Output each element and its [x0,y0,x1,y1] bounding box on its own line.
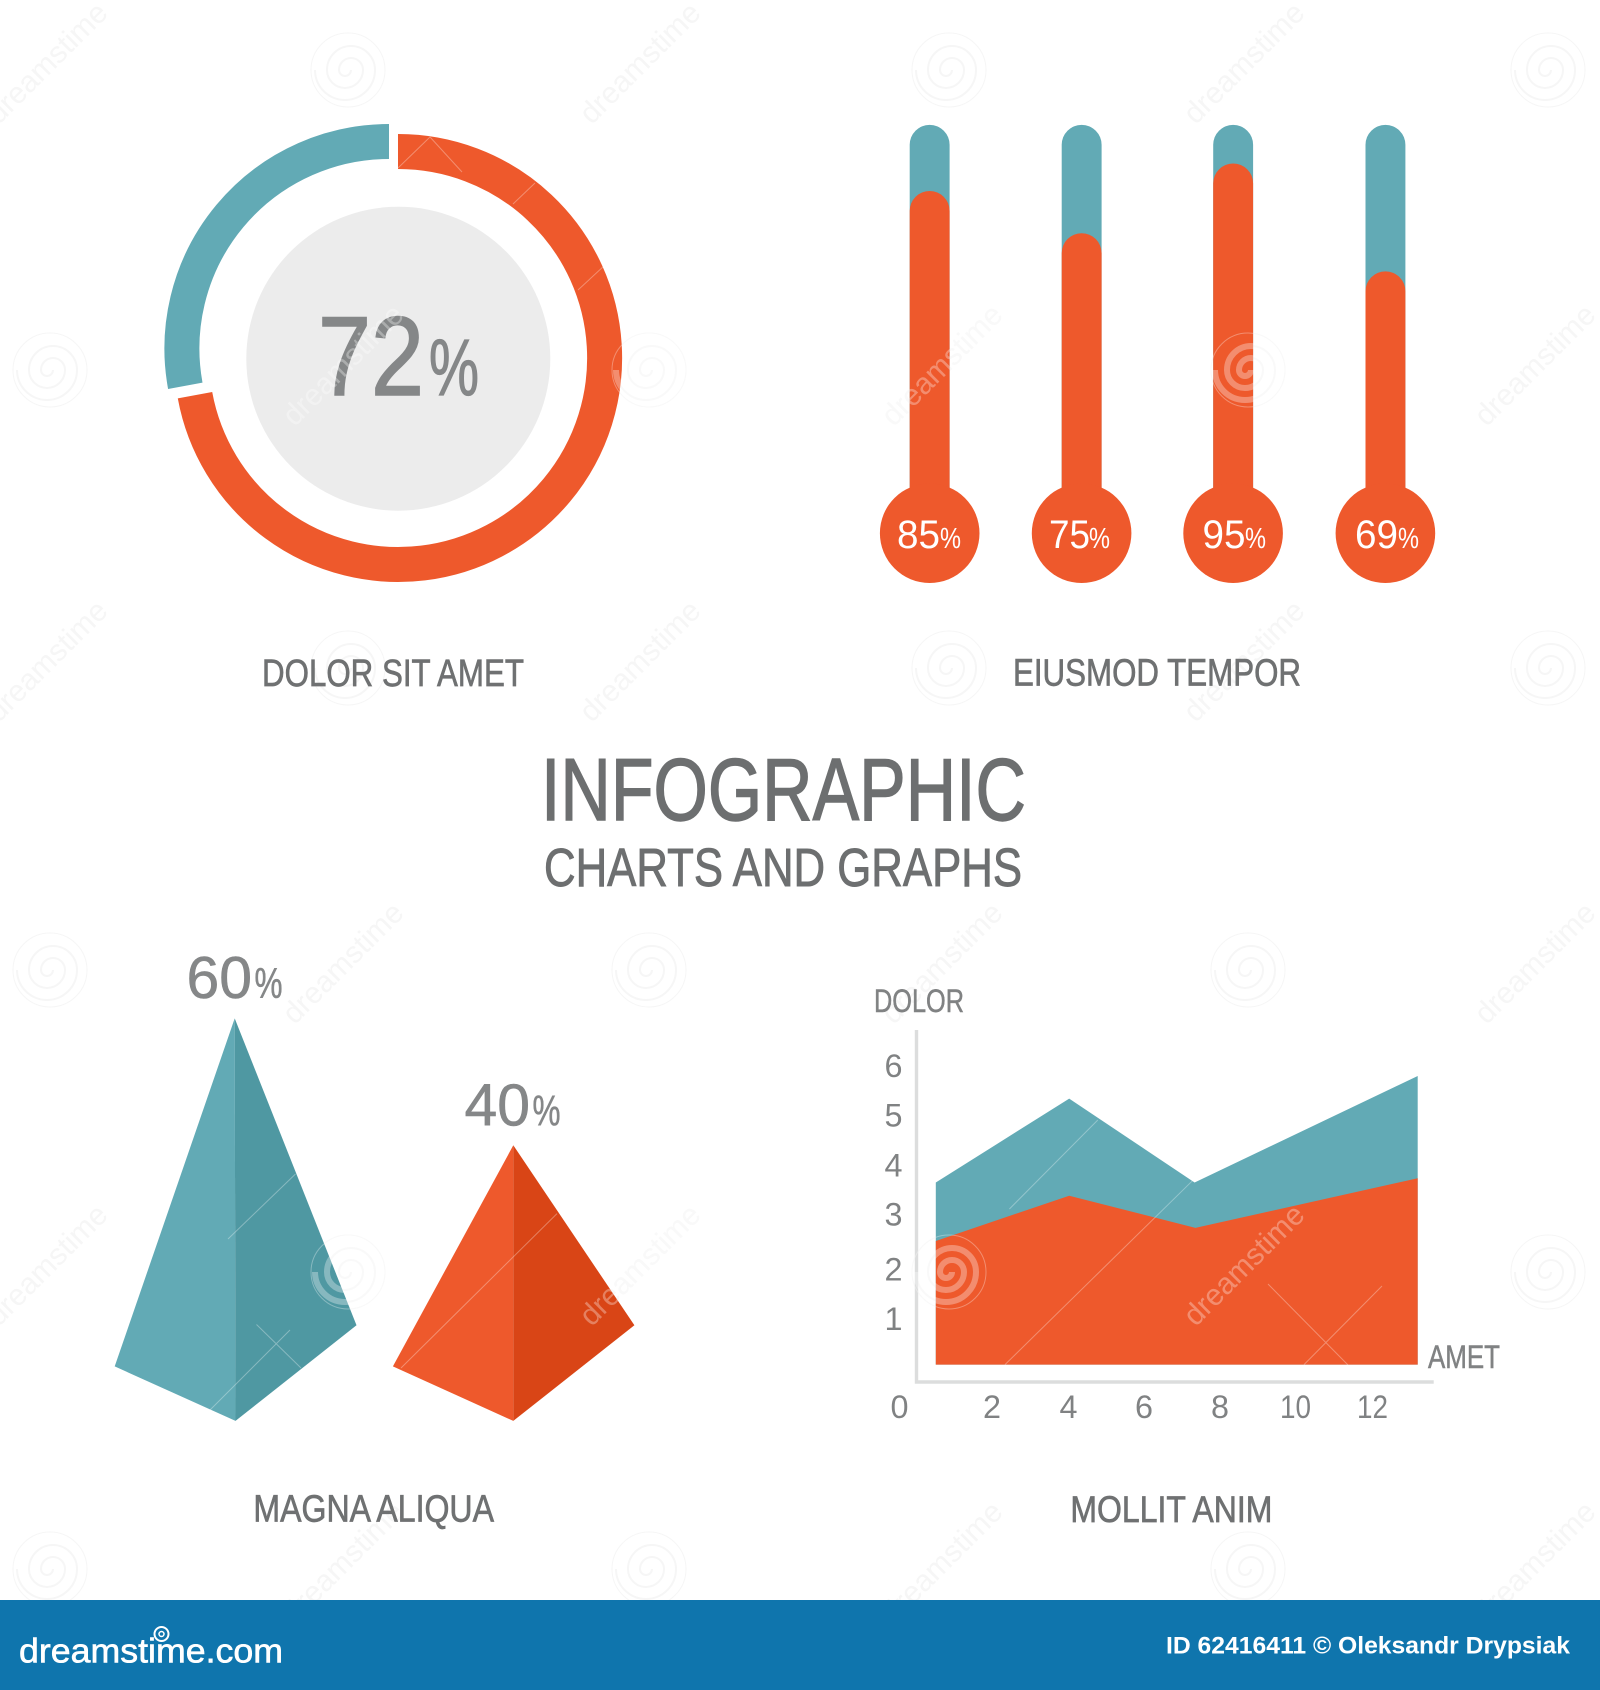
thermometer 69 percent: % [1398,523,1419,555]
faint watermark pattern: dreamstime [1177,0,1311,130]
panel: pyramids [115,945,634,1421]
x axis title: AMET [1428,1339,1500,1375]
thermometer 95 percent: 95 [1202,513,1246,557]
y axis labels: 2 [884,1252,902,1288]
x axis labels: 6 [1135,1389,1153,1425]
heading: magna aliqua: MAGNA ALIQUA [253,1488,494,1530]
faint watermark pattern: dreamstime [875,1495,1009,1629]
donut center disc [246,207,550,511]
faint watermark pattern: dreamstime [573,594,707,728]
x axis labels: 10 [1280,1389,1311,1425]
y axis labels: 1 [884,1301,902,1337]
watermark overlay on coloured shapes: dreamstime [1177,1198,1311,1332]
thermometer 95 percent [1183,125,1283,583]
footer credit: ID 62416411 © Oleksandr Drypsiak [1166,1632,1571,1659]
donut value: % [429,323,479,412]
faint watermark pattern: dreamstime [1468,298,1600,432]
y axis labels: 3 [884,1196,902,1232]
panel: donut chart [182,141,605,564]
faint watermark pattern: dreamstime [276,1495,410,1629]
teal area series [936,1076,1418,1365]
subtitle: CHARTS AND GRAPHS [544,838,1022,898]
faint watermark pattern: dreamstime [573,1198,707,1332]
thermometer 85 percent: % [940,523,961,555]
label 60 percent [186,945,282,1011]
thermometer 75 percent: 75 [1049,513,1090,557]
y axis labels: 5 [884,1097,902,1133]
label 60 percent: 60 [186,945,252,1011]
thermometer 75 percent [1032,125,1131,583]
faint watermark pattern: dreamstime [875,298,1009,432]
orange pyramid [393,1145,634,1421]
donut value: 72 [318,294,424,419]
title: INFOGRAPHIC [541,740,1026,839]
x axis labels: 12 [1357,1389,1388,1425]
faint watermark pattern: dreamstime [875,896,1009,1030]
thermometer 95 percent: % [1245,523,1266,555]
donut teal segment [182,141,389,386]
faint watermark pattern: dreamstime [1177,594,1311,728]
donut orange segment [195,151,605,565]
teal pyramid [115,1018,356,1421]
watermark overlay on coloured shapes: dreamstime [573,1198,707,1332]
faint watermark pattern: dreamstime [1468,1495,1600,1629]
x axis labels: 8 [1211,1389,1229,1425]
watermark overlay on coloured shapes: dreamstime [276,298,410,432]
footer bar [0,1600,1600,1690]
label 40 percent: % [532,1087,560,1135]
faint watermark pattern: dreamstime [1468,896,1600,1030]
x axis labels: 0 [890,1389,908,1425]
thermometer 85 percent: 85 [897,513,940,557]
label 40 percent: 40 [464,1072,530,1138]
heading: dolor sit amet: DOLOR SIT AMET [262,652,524,695]
thermometer 75 percent: % [1089,523,1110,555]
y axis title: DOLOR [874,983,964,1019]
heading: mollit anim: MOLLIT ANIM [1070,1488,1272,1530]
thermometer 69 percent [1336,125,1435,583]
watermark overlay on coloured shapes: dreamstime [875,298,1009,432]
panel: area chart [874,983,1500,1425]
x axis labels: 2 [983,1389,1001,1425]
heading: eiusmod tempor: EIUSMOD TEMPOR [1013,652,1301,694]
watermark overlay on coloured shapes [210,137,1382,1410]
y axis labels: 4 [884,1147,902,1183]
footer logo: dreamstime.com [19,1633,283,1671]
x axis labels: 4 [1060,1389,1078,1425]
faint watermark pattern: dreamstime [276,896,410,1030]
y axis labels [884,1048,902,1337]
thermometer 69 percent: 69 [1355,513,1398,557]
chart axes [916,1030,1434,1382]
label 60 percent: % [254,960,282,1008]
y axis labels: 6 [884,1048,902,1084]
label 40 percent [464,1072,560,1138]
orange area series [936,1178,1418,1365]
thermometer 85 percent [880,125,980,583]
x axis labels [890,1389,1388,1425]
panel: thermometers [880,125,1435,583]
faint watermark pattern: dreamstime [573,0,707,130]
